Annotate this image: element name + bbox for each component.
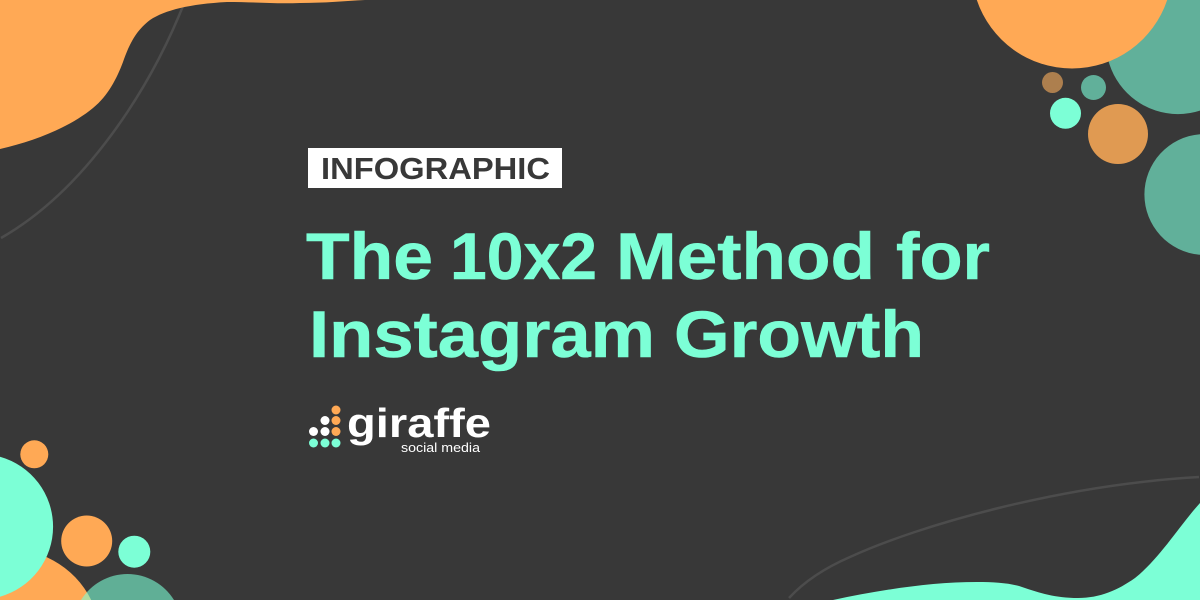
title: 10x2 <box>450 219 597 293</box>
badge: infographic: INFOGRAPHIC <box>321 151 550 186</box>
title: for <box>896 219 990 293</box>
title: Method <box>616 219 875 293</box>
title: The <box>306 219 433 293</box>
title <box>306 219 990 371</box>
logo wordmark: giraffe <box>347 400 491 446</box>
decorative curve: bottom right <box>789 477 1199 598</box>
decorative curve: top left <box>1 1 185 238</box>
logo: giraffe social media <box>309 400 491 455</box>
title: Instagram <box>309 297 655 371</box>
icon: logo dots <box>309 406 340 448</box>
orange blob: top left <box>0 0 365 149</box>
logo tagline: social media <box>401 441 480 455</box>
mint blob: bottom right <box>833 503 1200 600</box>
title: Growth <box>674 297 924 371</box>
circle cluster: top right <box>977 0 1200 255</box>
circle cluster: bottom left <box>0 440 174 600</box>
